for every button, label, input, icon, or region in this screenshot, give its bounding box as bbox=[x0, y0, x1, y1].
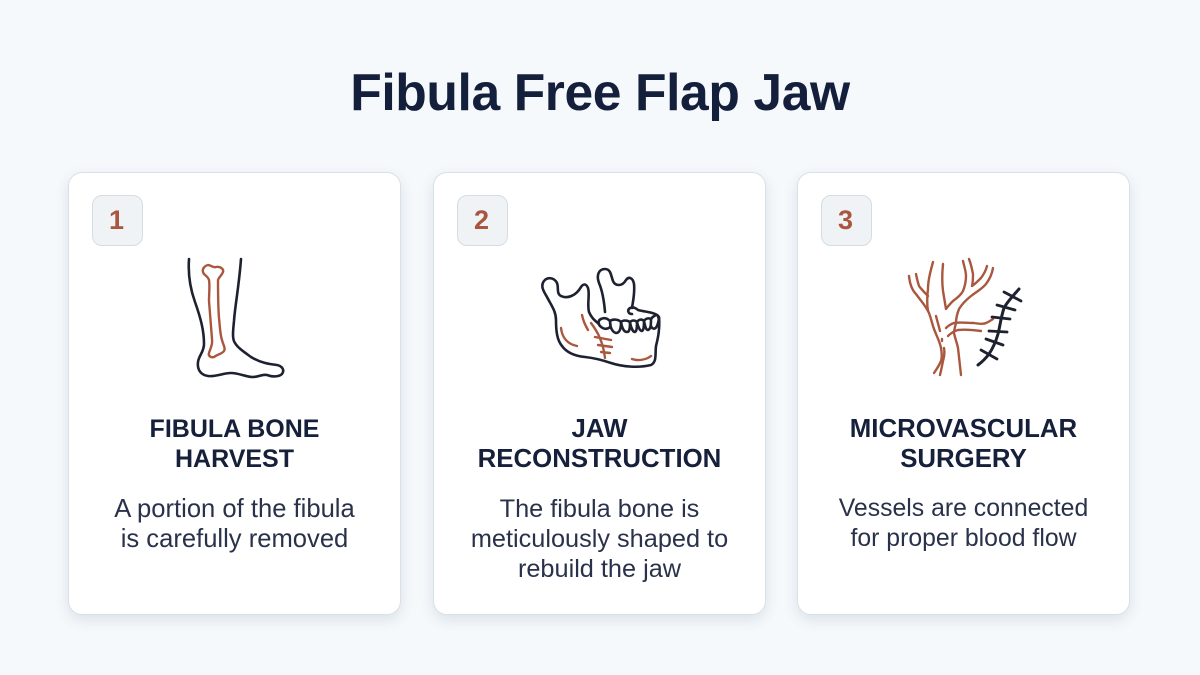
heading bbox=[150, 415, 319, 473]
description: is carefully removed bbox=[121, 525, 348, 553]
step number 2 bbox=[457, 195, 508, 246]
description: Vessels are connected bbox=[839, 495, 1088, 522]
panel: fibula bone harvest bbox=[68, 172, 401, 615]
description: A portion of the fibula bbox=[114, 495, 355, 523]
description bbox=[114, 495, 355, 553]
step number 1: 1 bbox=[109, 205, 124, 235]
description: for proper blood flow bbox=[850, 525, 1077, 552]
description bbox=[471, 495, 728, 583]
title: Fibula Free Flap Jaw bbox=[350, 63, 850, 121]
step number 1 bbox=[92, 195, 143, 246]
heading: SURGERY bbox=[900, 445, 1027, 473]
heading: HARVEST bbox=[175, 445, 294, 473]
heading: MICROVASCULAR bbox=[850, 415, 1077, 443]
icon: leg with fibula bone bbox=[187, 258, 285, 378]
heading bbox=[850, 415, 1077, 473]
heading: JAW bbox=[572, 415, 627, 443]
description: rebuild the jaw bbox=[518, 555, 681, 583]
step number 2: 2 bbox=[474, 205, 489, 235]
icon: jawbone with graft bbox=[541, 268, 661, 368]
heading: FIBULA BONE bbox=[150, 415, 319, 443]
description: meticulously shaped to bbox=[471, 525, 728, 553]
panel: jaw reconstruction bbox=[433, 172, 766, 615]
heading bbox=[478, 415, 721, 473]
step number 3 bbox=[821, 195, 872, 246]
icon: branching vessels and suture bbox=[908, 258, 1022, 376]
description bbox=[838, 495, 1088, 552]
description: The fibula bone is bbox=[500, 495, 699, 523]
heading: RECONSTRUCTION bbox=[478, 445, 721, 473]
step number 3: 3 bbox=[838, 205, 853, 235]
panel: microvascular surgery bbox=[797, 172, 1130, 615]
